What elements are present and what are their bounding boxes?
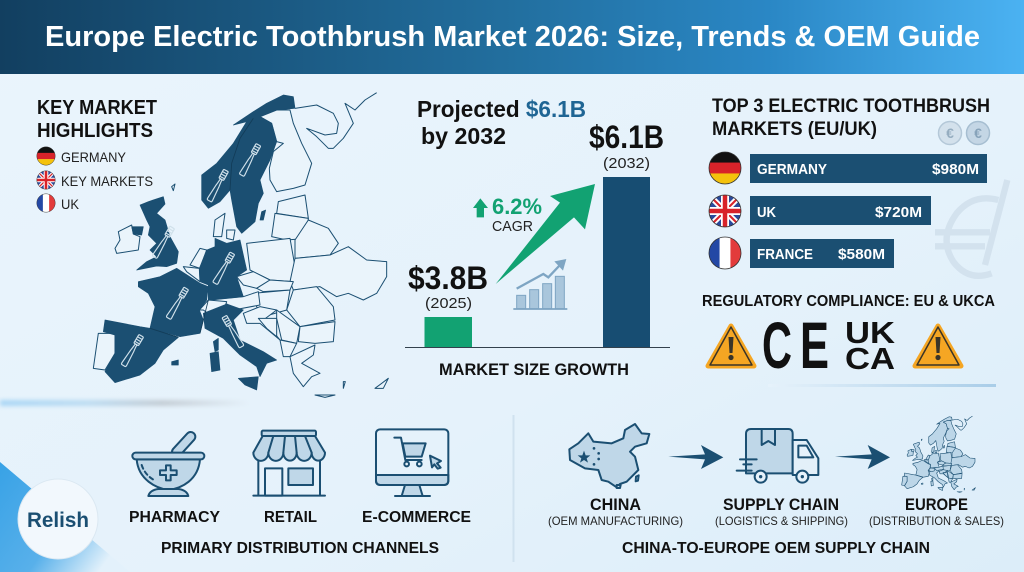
label: key markets: KEY MARKETS [61, 173, 153, 189]
icon: mini bar chart [513, 259, 567, 309]
panel: market size growth chart [405, 96, 670, 379]
icon: warning triangle left [708, 326, 754, 366]
panel: market size growth chart: by 2032 [421, 123, 506, 149]
icon: warning triangle right [915, 326, 961, 366]
caption: China-to-Europe OEM supply chain: CHINA-TO-EUROPE OEM SUPPLY CHAIN [622, 540, 930, 557]
label: retail: RETAIL [264, 509, 317, 526]
label: China: CHINA [590, 495, 641, 514]
UKCA mark [845, 315, 896, 376]
caption: primary distribution channels: PRIMARY DISTRIBUTION CHANNELS [161, 540, 439, 557]
label: e-commerce: E-COMMERCE [362, 509, 471, 526]
title: Europe Electric Toothbrush Market 2026: Size, Trends & OEM Guide [45, 21, 980, 53]
corner wedge [0, 462, 130, 572]
label: pharmacy: PHARMACY [129, 509, 220, 526]
bar: 2032 [603, 177, 650, 347]
label: supply chain: SUPPLY CHAIN [723, 495, 839, 514]
year: 2025: (2025) [425, 295, 472, 312]
arrow: supply chain to Europe [835, 445, 890, 469]
logo: Relish: Relish [27, 508, 89, 532]
label: Europe: EUROPE [905, 495, 968, 514]
icon: delivery truck [737, 429, 818, 483]
bar: UK: UK [757, 205, 776, 221]
sublabel: logistics and shipping: (LOGISTICS & SHIPPING) [715, 514, 848, 528]
value: CAGR: 6.2% [492, 194, 542, 219]
icon: euro coins: € [974, 125, 982, 141]
flag: Germany [37, 147, 55, 166]
bar: Germany: GERMANY [757, 162, 827, 178]
icon: pharmacy [132, 437, 204, 496]
flag: UK [37, 171, 55, 189]
heading: key market highlights: KEY MARKET [37, 97, 157, 119]
panel: regulatory compliance [702, 293, 996, 387]
header banner [0, 0, 1024, 74]
bar: 2025 [424, 317, 472, 347]
bar: France [750, 239, 894, 268]
heading: projected: Projected $6.1B [417, 96, 586, 122]
bar: Germany: $980M [932, 162, 979, 178]
caption: market size growth: MARKET SIZE GROWTH [439, 360, 629, 379]
map of Europe [93, 93, 388, 397]
flag: France [37, 194, 56, 212]
bar: UK [750, 196, 931, 225]
icon: euro watermark [935, 180, 1007, 276]
icon: small up arrow [473, 198, 488, 217]
bar: France: FRANCE [757, 247, 813, 263]
axis [405, 346, 670, 348]
arrow: China to supply chain [668, 445, 723, 469]
section separator [0, 400, 250, 406]
panel: supply chain [548, 416, 1004, 557]
CE mark: E [800, 308, 829, 382]
bar: UK: $720M [875, 205, 922, 221]
icon: retail store [253, 431, 325, 496]
icon: China map [569, 424, 649, 488]
UKCA mark: UK [845, 315, 896, 350]
heading: top 3 markets: TOP 3 ELECTRIC TOOTHBRUSH [712, 96, 990, 117]
icon: euro coins: € [946, 125, 954, 141]
arrow: growth [496, 184, 595, 284]
heading: regulatory compliance: REGULATORY COMPLIANCE: EU & UKCA [702, 293, 995, 310]
label: UK: UK [61, 196, 80, 212]
sublabel: distribution and sales: (DISTRIBUTION & SALES) [869, 514, 1004, 528]
panel: top 3 markets: MARKETS (EU/UK) [712, 119, 877, 140]
bar: Germany [750, 154, 987, 183]
icon: euro coins [938, 122, 990, 144]
flag: UK [709, 195, 741, 227]
icon: Europe mini map [902, 416, 975, 492]
panel: key market highlights legend: HIGHLIGHTS [37, 120, 153, 142]
icon: e-commerce [376, 429, 448, 496]
panel: distribution channels [129, 429, 471, 557]
year: 2032: (2032) [603, 155, 650, 172]
label: CAGR: CAGR [492, 218, 533, 235]
panel: top 3 markets [709, 96, 1007, 276]
value: 3.8B: $3.8B [408, 260, 488, 296]
bar: France: $580M [838, 247, 885, 263]
panel: key market highlights legend [37, 97, 157, 212]
sublabel: OEM manufacturing: (OEM MANUFACTURING) [548, 514, 683, 528]
value: 6.1B: $6.1B [589, 119, 664, 155]
logo: Relish [18, 479, 98, 559]
flag: Germany [709, 152, 741, 185]
CE mark: C [762, 308, 792, 382]
flag: France [709, 237, 742, 269]
label: Germany: GERMANY [61, 149, 127, 165]
UKCA mark: CA [845, 341, 895, 376]
